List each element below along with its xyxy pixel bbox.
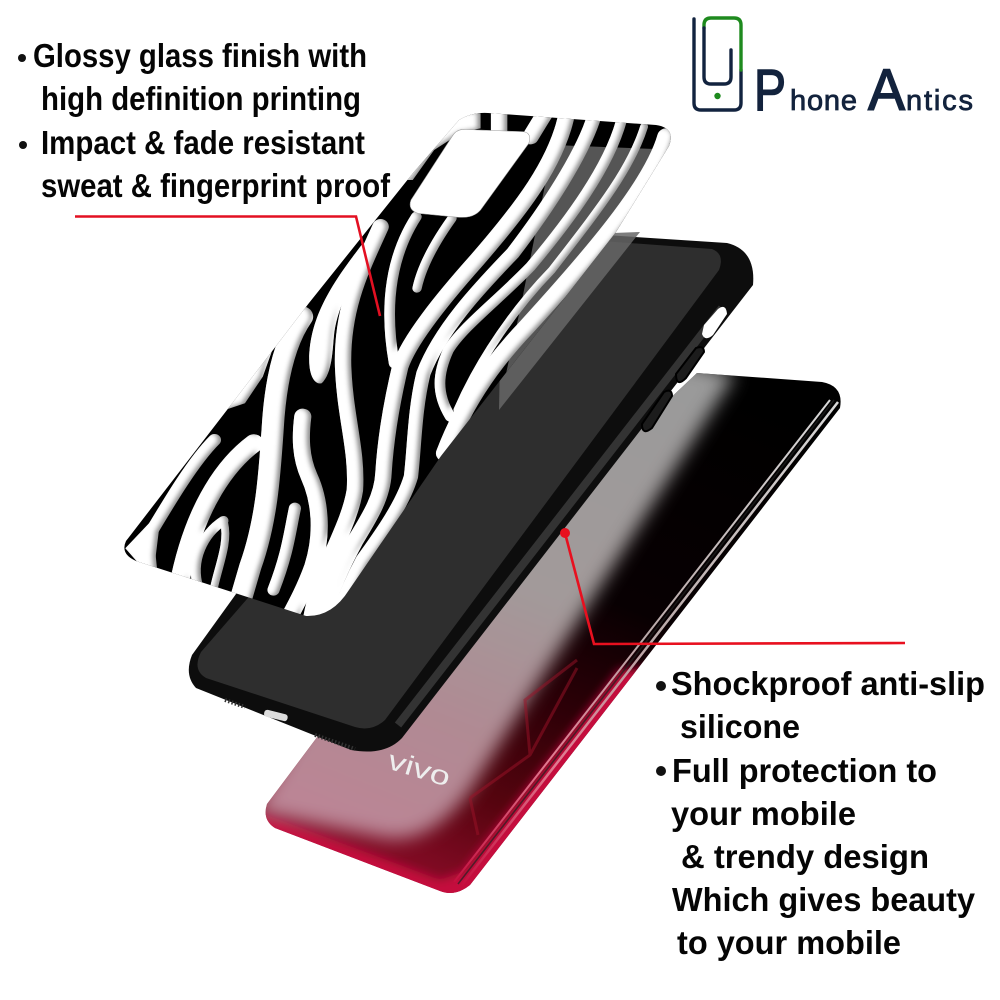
zebra back glass [124, 110, 680, 620]
text block: glass features: Impact & fade resistant [41, 124, 365, 161]
logo wordmark: hone [790, 85, 857, 117]
logo wordmark: ntics [906, 85, 973, 117]
text block: glass features [18, 37, 391, 204]
text block: silicone features: Full protection to [672, 752, 937, 789]
logo wordmark: A [868, 58, 905, 123]
zebra stripes [141, 110, 666, 620]
text block: glass features: Glossy glass finish with [33, 37, 367, 74]
case volume buttons [642, 347, 704, 431]
text block: silicone features: Which gives beauty [672, 881, 976, 918]
text block: glass features: sweat & fingerprint proof [41, 167, 391, 204]
callout line: silicone [560, 528, 905, 644]
case charging port [263, 709, 288, 722]
text block: silicone features: your mobile [671, 795, 856, 832]
text block: silicone features: to your mobile [677, 924, 901, 961]
vivo logo: vivo [384, 745, 454, 792]
logo wordmark [754, 58, 973, 123]
red back phone [250, 360, 841, 905]
crimson bottom edge [250, 669, 660, 905]
callout line: glass [75, 216, 380, 316]
glare strip over case [499, 232, 640, 410]
case screen panel [197, 238, 721, 728]
text block: silicone features: silicone [680, 708, 800, 745]
black silicone case [189, 232, 753, 752]
logo: Phone Antics [694, 18, 973, 123]
translucent upper right of glass [506, 146, 667, 372]
text block: glass features: high definition printing [41, 80, 361, 117]
logo icon: phone outline [694, 18, 741, 110]
blob shapes [309, 243, 368, 384]
silver side rim [462, 402, 838, 885]
case speaker grille [225, 700, 355, 749]
text block: silicone features [656, 665, 985, 961]
text block: silicone features: & trendy design [681, 838, 929, 875]
grey fade band on back phone [255, 360, 735, 839]
case side hole [702, 307, 727, 338]
logo wordmark: P [754, 58, 786, 123]
case side highlight [398, 308, 722, 725]
camera cut-out [410, 129, 530, 217]
red diamond pattern [470, 660, 577, 835]
text block: silicone features: Shockproof anti-slip [671, 665, 985, 702]
